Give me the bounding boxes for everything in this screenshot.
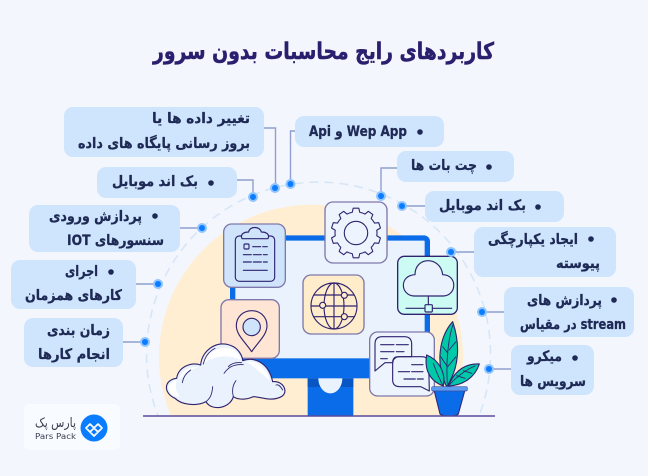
background peach semicircle — [159, 205, 463, 416]
icon: chat bubbles tile — [370, 332, 434, 396]
logo: Pars Pack: Pars Pack — [35, 432, 76, 441]
label: IOT input: پردازش ورودی — [49, 209, 142, 225]
icon: location pin tile — [221, 300, 279, 358]
label: stream processing: پردازش های — [527, 293, 602, 309]
label: data change: بروز رسانی پایگاه های داده — [78, 134, 250, 152]
label: job scheduling — [24, 318, 123, 367]
label: mobile backend right: بک اند موبایل — [439, 198, 526, 214]
logo: Pars Pack: پارس پک — [35, 416, 76, 431]
icon: foreground cloud — [166, 344, 285, 408]
label: continuous integration: ایجاد یکپارچگی — [488, 230, 578, 248]
ground line — [143, 415, 495, 417]
label: concurrent jobs: اجرای — [65, 264, 98, 280]
illustration — [166, 202, 479, 416]
label: chatbots: چت بات ها — [411, 158, 477, 174]
monitor — [230, 238, 430, 416]
label: stream processing: stream در مقیاس — [520, 317, 626, 333]
label: continuous integration: پیوسته — [556, 256, 600, 272]
label: mobile backend left: بک اند موبایل — [112, 174, 198, 190]
label: job scheduling: انجام کارها — [38, 347, 110, 363]
connector lines — [123, 128, 511, 369]
icon: clipboard tile — [224, 224, 285, 287]
label: api and web app: Wep App و Api — [309, 124, 407, 140]
label: api and web app — [295, 116, 444, 147]
label: concurrent jobs: کارهای همزمان — [25, 288, 122, 304]
connector dots — [140, 179, 494, 374]
logo: Pars Pack — [24, 404, 120, 450]
label: stream processing — [504, 287, 634, 337]
label: microservices: سرویس ها — [520, 374, 586, 390]
title: کاربردهای رایج محاسبات بدون سرور — [152, 39, 494, 65]
icon: cloud network tile — [398, 256, 457, 314]
icon: gear tile — [325, 202, 387, 263]
icon: globe tile — [303, 275, 364, 334]
label: data change: تغییر داده ها یا — [152, 111, 250, 127]
label: job scheduling: زمان بندی — [47, 323, 110, 339]
label: IOT input: سنسورهای IOT — [67, 233, 164, 249]
dashed orbit — [146, 181, 492, 416]
label: microservices: میکرو — [526, 349, 562, 365]
icon: potted plant — [426, 322, 479, 416]
label: microservices — [511, 345, 594, 395]
label: data change — [64, 107, 264, 157]
label: continuous integration — [474, 227, 616, 277]
label: chatbots — [397, 151, 514, 182]
label: mobile backend right — [425, 191, 564, 222]
label: IOT input — [29, 205, 180, 252]
label: concurrent jobs — [11, 260, 136, 309]
label: mobile backend left — [97, 167, 237, 198]
